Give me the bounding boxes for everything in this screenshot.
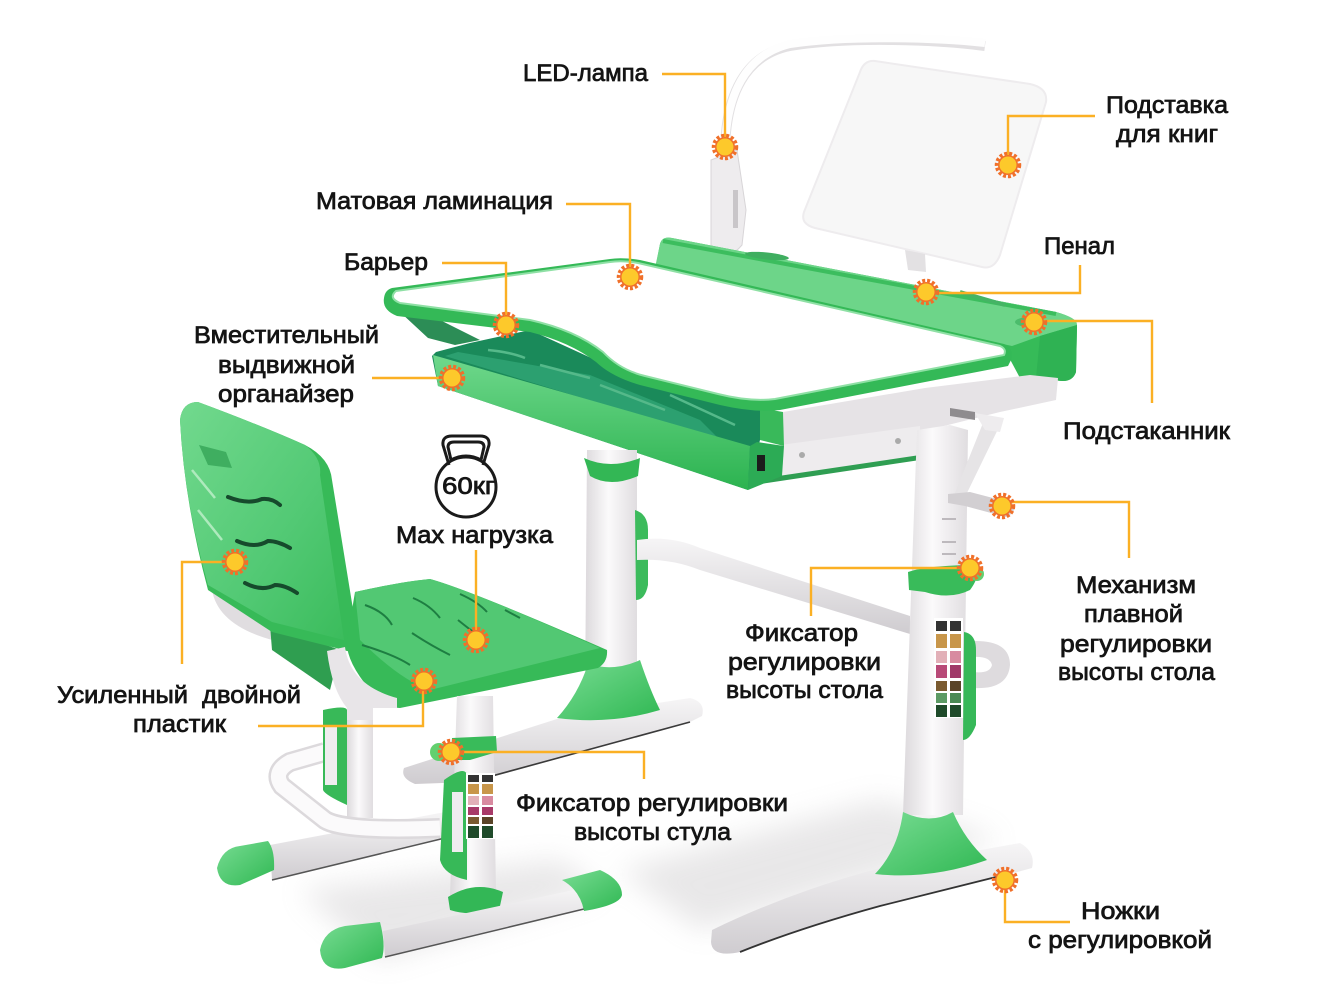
desk: rear green tray xyxy=(655,238,1077,381)
label: chair height lock: Фиксатор регулировки xyxy=(516,790,788,817)
desk: under frame xyxy=(758,375,1058,484)
chair height scale xyxy=(466,773,495,839)
label: book stand: для книг xyxy=(1116,121,1218,148)
marker dots xyxy=(224,136,1046,892)
label: LED lamp: LED-лампа xyxy=(523,60,649,87)
label: chair height lock: высоты стула xyxy=(574,819,732,846)
label: desk height lock: высоты стола xyxy=(726,677,884,704)
label: adjustable feet xyxy=(1028,898,1212,954)
desk: right leg xyxy=(711,408,1033,954)
label: organizer xyxy=(194,322,379,408)
label: height mechanism: Механизм xyxy=(1076,572,1196,599)
label: adjustable feet: Ножки xyxy=(1081,898,1160,925)
label: height mechanism: регулировки xyxy=(1060,631,1212,658)
chair: front column xyxy=(320,696,622,969)
floor shadows xyxy=(300,800,1000,960)
desk: drawer organizer xyxy=(432,330,784,490)
leader lines xyxy=(182,74,1152,922)
chair: back support xyxy=(212,590,340,690)
label: desk height lock xyxy=(726,620,884,704)
label: max load: Max нагрузка xyxy=(396,522,554,549)
label: book stand: Подставка xyxy=(1106,92,1229,119)
chair: backrest xyxy=(180,402,358,651)
desk height scale xyxy=(934,618,963,718)
label: reinforced plastic xyxy=(57,682,301,738)
desk: book stand xyxy=(803,61,1046,272)
label: height mechanism: высоты стола xyxy=(1058,659,1216,686)
label: pencil case: Пенал xyxy=(1044,233,1115,260)
desk: lamp xyxy=(711,38,985,255)
label: cup holder: Подстаканник xyxy=(1063,418,1231,445)
label: height mechanism xyxy=(1058,572,1216,686)
label: barrier: Барьер xyxy=(344,249,428,276)
label: height mechanism: плавной xyxy=(1084,601,1183,628)
desk: left leg xyxy=(403,450,910,784)
icon: kettlebell 60 kg xyxy=(436,436,496,517)
desk: table top xyxy=(384,258,1012,411)
label: desk height lock: Фиксатор xyxy=(745,620,858,647)
label: organizer: выдвижной xyxy=(218,352,355,379)
label: matte lamination: Матовая ламинация xyxy=(316,188,553,215)
chair: seat xyxy=(347,579,607,708)
label: desk height lock: регулировки xyxy=(728,649,881,676)
label: book stand xyxy=(1106,92,1229,148)
chair: back foot and footrest xyxy=(217,707,445,885)
chair: frame strip xyxy=(327,647,397,720)
label: organizer: органайзер xyxy=(218,381,354,408)
label: chair height lock xyxy=(516,790,788,846)
label: reinforced plastic: пластик xyxy=(133,711,227,738)
label: reinforced plastic: Усиленный двойной xyxy=(57,682,301,709)
icon: kettlebell 60 kg: 60кг xyxy=(442,473,495,500)
label: adjustable feet: с регулировкой xyxy=(1028,927,1212,954)
label: organizer: Вместительный xyxy=(194,322,379,349)
